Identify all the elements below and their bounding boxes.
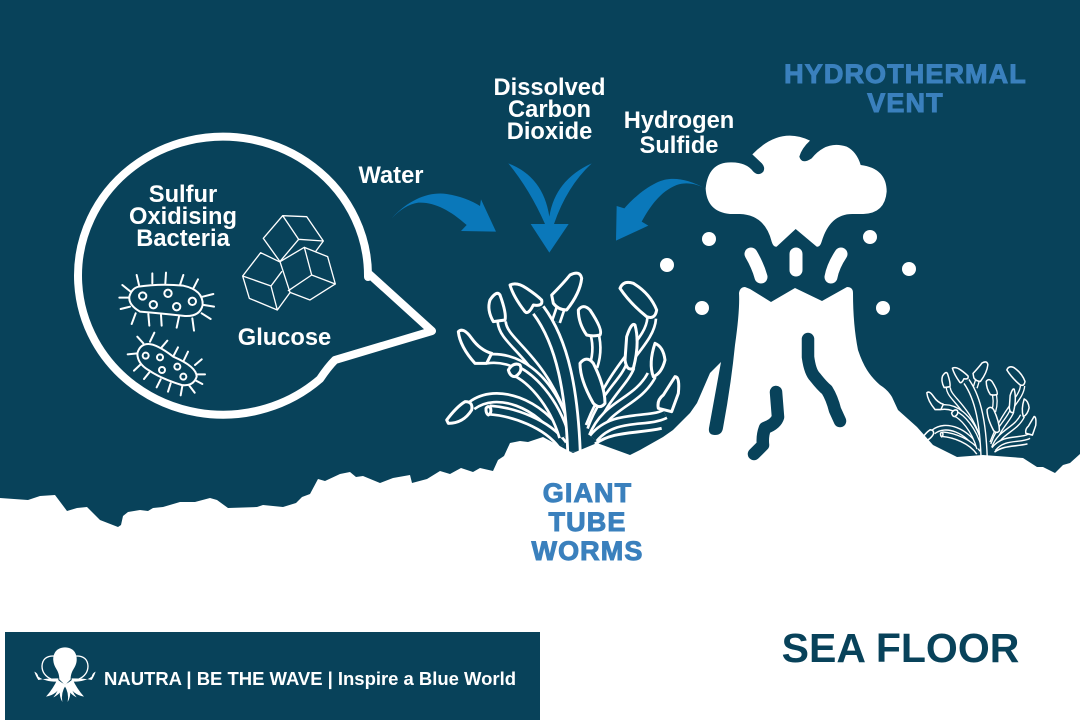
label: hydrogen sulfide — [624, 108, 734, 159]
volcano eruption cloud — [706, 136, 887, 247]
heading: hydrothermal vent: HYDROTHERMAL — [784, 59, 1027, 89]
heading: hydrothermal vent — [784, 59, 1027, 118]
label: water: Water — [359, 163, 423, 189]
icon: bacterium 1 — [119, 273, 214, 331]
arrow: carbon dioxide — [508, 163, 592, 253]
bubble label: glucose: Glucose — [238, 325, 331, 351]
icon: glucose cubes — [243, 216, 335, 310]
label: dissolved carbon dioxide: Dissolved — [494, 75, 605, 101]
bubble label: bacteria line 3: Bacteria — [136, 226, 231, 252]
icon: bacterium 2 — [128, 333, 205, 395]
heading: giant tube worms: WORMS — [532, 536, 643, 566]
heading: giant tube worms: GIANT — [543, 478, 632, 508]
volcano lava streaks — [754, 339, 840, 454]
label: hydrogen sulfide: Sulfide — [640, 133, 718, 159]
speech bubble — [78, 137, 432, 415]
tube worm colony: small — [921, 362, 1036, 456]
footer tagline: NAUTRA | BE THE WAVE | Inspire a Blue World — [104, 668, 516, 689]
label: dissolved carbon dioxide — [494, 75, 605, 145]
label: dissolved carbon dioxide: Dioxide — [507, 119, 592, 145]
icon: octopus logo — [34, 647, 96, 702]
heading: giant tube worms: TUBE — [549, 507, 626, 537]
heading: hydrothermal vent: VENT — [867, 88, 944, 118]
icon: bacteria and glucose — [119, 216, 335, 395]
arrow: water — [392, 194, 496, 232]
arrows — [392, 163, 705, 253]
footer banner — [5, 632, 540, 720]
label: hydrogen sulfide: Hydrogen — [624, 108, 734, 134]
label: dissolved carbon dioxide: Carbon — [508, 97, 591, 123]
sea floor and volcano silhouette — [0, 287, 1080, 720]
tube worm colony: large — [447, 273, 679, 452]
eruption debris — [660, 230, 916, 315]
bubble label: bacteria: Sulfur — [149, 182, 217, 208]
heading: sea floor: SEA FLOOR — [782, 625, 1019, 671]
arrow: hydrogen sulfide — [616, 179, 705, 241]
ocean background — [0, 0, 1080, 535]
bubble label: bacteria line 2: Oxidising — [129, 204, 237, 230]
heading: giant tube worms — [532, 478, 643, 566]
